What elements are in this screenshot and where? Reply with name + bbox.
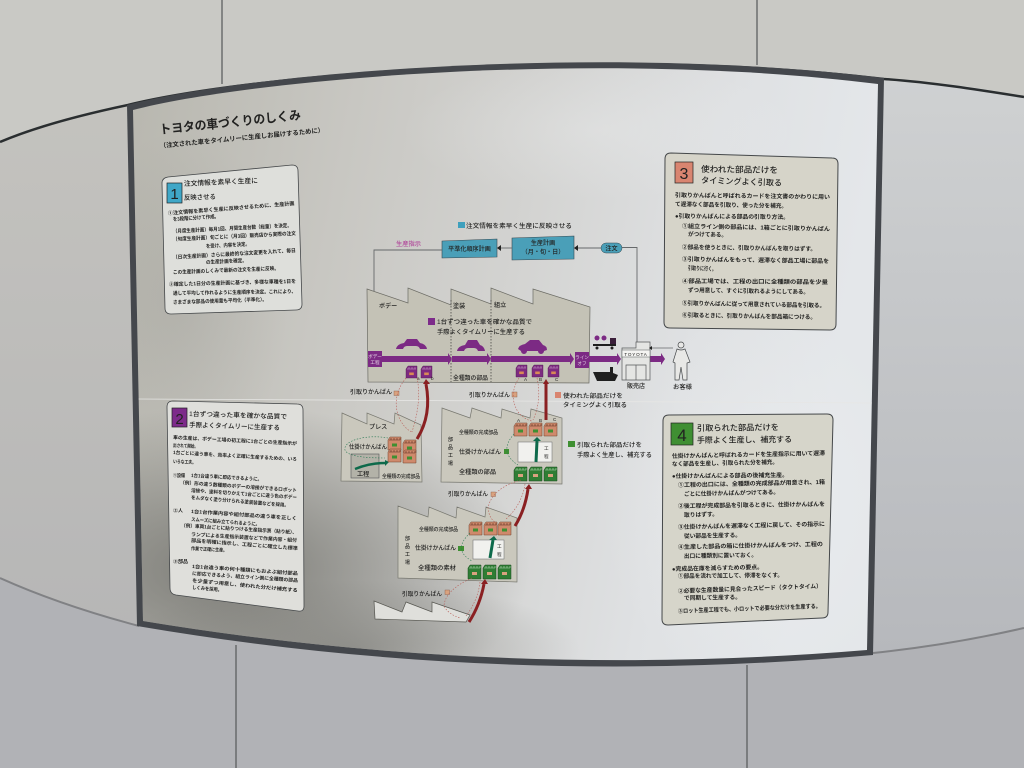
process labels: 塗装 [453,302,465,310]
parts boxes [406,365,559,382]
dealer building [622,342,650,390]
press plant: 工程 [357,470,369,478]
panel 2 body text: 1台1台違う車の何十種類にもおよぶ組付部品 [192,563,298,577]
customer: お客様 [673,383,692,391]
planning flow [372,222,637,349]
panel 4 heading [697,422,792,445]
panel 4 body text: ③ロット生産工程でも、小ロットで必要な分だけを生産する。 [678,602,821,615]
panel 2 body text: 作業で正確に生産。 [191,545,227,554]
panel 1 body text [168,200,296,306]
purple production line: 工程 [370,359,380,366]
badge 3 [675,162,693,183]
press plant [341,413,422,482]
withdrawal kanban labels [350,388,517,598]
panel 1 heading: 反映させる [184,192,216,202]
withdrawal kanban labels: 引取りかんばん [469,391,510,399]
title [159,107,324,150]
process labels: 組立 [494,301,506,309]
panel 3 body text: て遅滞なく部品を引取り、使った分を補充。 [675,200,787,210]
metal plaque [127,62,884,666]
panel 4 body text: ①部品を流れで加工して、停滞をなくす。 [678,571,783,580]
panel 3 body text: ⑤引取りかんばんに従って用意されている部品を引取る。 [682,299,825,309]
panel 1 body text: ①注文情報を素早く生産に反映させるために、生産計画 [168,200,295,217]
parts plant lower: 全種類の完成部品 [419,526,458,533]
panel 1 body text: を受け、内容を決定。 [206,241,250,250]
panel 3 body text: 引取りに行く。 [688,264,716,273]
assembly plant [367,288,665,383]
panel 2 body text: いろな工夫。 [173,458,196,466]
panel 3 body text: ⑥引取るときに、引取りかんばんを部品箱につける。 [682,311,816,321]
panel 2 body text: ランプによる生産指示装置などで作業内容・組付 [191,531,297,544]
panel 2 body text: 出されて開始。 [173,442,198,450]
badge 2 [172,408,187,428]
panel 2 body text: 部品を明確に指示し、工程ごとに確立した標準 [191,537,298,552]
purple production line: オフ [577,361,587,366]
parts plant upper: 工 [448,453,453,459]
panel 3 body text: ずつ用意して、すぐに引取れるようにしてある。 [688,286,809,296]
parts plant upper: 全種類の部品 [459,468,496,476]
truck and ship [593,336,618,381]
purple production line [368,351,665,368]
panel 2 body text: 1台1台違う車に即応できるように。 [191,472,262,483]
panel 4 body text: で同期して生産する。 [684,593,741,602]
process labels: ボデー [379,302,397,310]
panel 3: pull only used parts [664,153,838,330]
panel 2 body text: に即応できるよう、組立ライン側に全種類の部品 [192,570,298,584]
press plant: プレス [369,424,387,431]
panel 4 heading: 手際よく生産し、補充する [697,434,792,445]
label: section 3 reference [555,392,627,409]
dealer building: TOYOTA [624,352,648,357]
label: section 3 reference: 使われた部品だけを [563,392,623,400]
label: section 4 reference: 引取られた部品だけを [577,441,642,449]
panel 1: order information [162,165,302,314]
panel 2 heading: 1台ずつ違った車を確かな品質で [189,409,288,421]
panel 4 body text: ③仕掛けかんばんを遅滞なく工程に戻して、その指示に [678,520,825,531]
badge 4: 4 [677,426,687,445]
panel 3 heading: 使われた部品だけを [701,164,778,175]
purple production line: ボデー [368,353,382,360]
label: section 1 reference: 注文情報を素早く生産に反映させる [466,222,572,230]
supplier plant partial [374,601,470,622]
panel 2 body text: スムーズに組み立てられるように。 [191,516,260,528]
press plant: 全種類の完成部品 [382,473,420,480]
badge 2: 2 [175,411,184,428]
panel 4 body text: ●完成品在庫を減らすための要点。 [672,563,763,573]
panel 2 body text: をムダなく塗り分けられる塗装装置などを採用。 [191,494,289,509]
panel 1 heading [184,176,258,202]
box: leveled sequence plan: 平準化順序計画 [448,245,491,253]
customer [649,342,692,391]
purple production line: ライン [575,355,589,361]
title: （注文された車をタイムリーに生産しお届けするために） [159,125,324,150]
label: section 2 reference: 手際よくタイムリーに生産する [437,328,525,336]
panel 2 body text: 1台1台作業内容や組付部品の違う車を正しく [191,508,297,522]
parts plant upper: 仕掛けかんばん [459,448,501,456]
parts plant upper [441,408,562,484]
panel 4 body text: 出口に種類別に置いておく。 [684,551,757,560]
kanban loops dashed [396,378,539,618]
parts plant lower: 品 [405,544,410,550]
box: production plan [512,236,574,260]
label: section 4 reference [568,441,652,459]
panel 3 heading: タイミングよく引取る [701,175,782,188]
parts plant upper: 工 [544,446,549,451]
label: production instruction: 生産指示 [396,240,421,248]
panel 2 body text: （例）車両1台ごとに貼りつける生産指示票（貼り紙）、 [181,522,297,536]
badge 1 [167,183,182,203]
badge 1: 1 [170,186,179,203]
parts plant lower: 全種類の素材 [418,564,456,572]
panel 1 body text: を3段階に分けて作成。 [173,213,219,223]
panel 1 body text: の生産計画を確定。 [206,257,247,266]
box: production plan: （月・旬・日） [522,248,564,256]
panel 3 body text: ③引取りかんばんをもって、遅滞なく部品工場に部品を [682,255,829,265]
red withdrawal arrows [417,379,549,622]
panel 3 body text [675,191,830,321]
panel 3 heading [701,164,782,188]
withdrawal kanban labels: 引取りかんばん [350,388,392,396]
parts plant lower: 場 [405,559,410,566]
parts plant upper: A [517,418,521,423]
arrow: order to plan [372,245,637,349]
panel 2 body text: ③部品 [173,558,188,565]
panel 1 body text: 通して平均して作れるように生産順序を決定。これにより、 [173,288,296,297]
panel 4 heading: 引取られた部品だけを [697,422,779,433]
panel 4: produce and replenish [662,414,833,625]
panel 2: one car at a time [167,401,304,611]
panel 3 body text: ●引取りかんばんによる部品の引取り方法。 [675,212,789,221]
panel 4 body text: ごとに仕掛けかんばんがつけてある。 [684,488,779,498]
parts plant lower: 仕掛けかんばん [415,544,456,552]
pill: order: 注文 [605,244,618,252]
panel 4 body text: ②後工程が完成部品を引取るときに、仕掛けかんばんを [678,500,825,510]
parts plant upper: 全種類の完成部品 [459,429,498,436]
panel 2 body text: （例）形の違う数種類のボデーの溶接ができるロボット [180,479,297,494]
press plant: 仕掛けかんばん [349,443,387,451]
parts plant upper: 部 [448,436,453,443]
parts plant lower [398,506,517,582]
badge 3: 3 [680,166,689,183]
parts boxes: B [539,377,542,382]
parts boxes: C [555,377,559,382]
panel 4 body text: ①工程の出口には、全種類の完成部品が用意され、1箱 [678,478,825,489]
label: all parts: 全種類の部品 [453,374,488,382]
panel 2 body text: を少量ずつ用意し、使われた分だけ補充する [192,577,298,594]
badge 4 [671,423,693,445]
panel 3 body text: 引取りかんばんと呼ばれるカードを注文書のかわりに用い [675,191,830,201]
panel 2 body text: ①設備 [173,472,185,479]
parts plant upper: B [539,418,542,423]
parts plant upper: 品 [448,445,453,451]
parts boxes: a [417,376,420,381]
parts plant upper: C [553,417,557,422]
panel 1 body text: （日次生産計画）さらに最終的な注文変更を入れて、毎日 [173,247,296,261]
label: section 4 reference: 手際よく生産し、補充する [577,451,652,459]
panel 1 body text: （月度生産計画）毎月1回、月間生産台数（総量）を決定。 [173,222,292,235]
panel 2 body text: 溶接や、塗料を切りかえて1台ごとに違う色のボデー [191,487,297,501]
panel 4 body text: 従い部品を生産する。 [684,531,741,540]
parts plant lower: 程 [497,551,502,558]
panel 3 body text: ①組立ライン側の部品には、1箱ごとに引取りかんばん [682,222,830,233]
label: section 2 reference: 1台ずつ違った車を確かな品質で [437,318,532,326]
panel 4 body text: 取りはずす。 [684,510,718,519]
parts plant lower: 工 [497,544,502,549]
parts plant upper: 場 [448,460,453,467]
panel 3 body text: ②部品を使うときに、引取りかんばんを取りはずす。 [682,243,816,253]
label: section 2 reference [428,318,532,336]
dealer building: 販売店 [627,382,645,390]
process labels [379,301,506,310]
panel 2 heading [189,409,288,432]
panel 1 heading: 注文情報を素早く生産に [184,176,258,188]
panel 2 heading: 手際よくタイムリーに生産する [189,420,280,432]
box: production plan: 生産計画 [531,239,555,247]
parts plant lower: 工 [405,552,410,558]
panel 2 body text: 車の生産は、ボデー工場の初工程に1台ごとの生産指示が [173,434,297,447]
panel 2 body text: ②人 [173,507,183,514]
panel 4 body text: ④生産した部品の箱に仕掛けかんばんをつけ、工程の [678,540,823,551]
panel 4 body text: 仕掛けかんばんと呼ばれるカードを生産指示に用いて遅滞 [672,449,825,460]
panel 4 body text: ●仕掛けかんばんによる部品の後補充生産。 [672,471,788,480]
box: leveled sequence plan [442,239,497,258]
panel 3 body text: ④部品工場では、工程の出口に全種類の部品を少量 [682,277,828,286]
panel 2 body text [173,434,298,594]
parts plant lower: 部 [405,535,410,542]
withdrawal kanban labels: 引取りかんばん [402,590,442,598]
parts boxes: A [524,377,528,382]
panel 3 body text: がつけてある。 [688,230,727,239]
car bodies [396,339,547,354]
label: section 3 reference: タイミングよく引取る [563,401,627,409]
parts boxes: b [431,376,434,381]
panel 1 body text: この生産計画のしくみで最新の注文を生産に反映。 [173,265,279,276]
panel 4 body text [672,449,825,615]
panel 4 body text: ②必要な生産数量に見合ったスピード（タクトタイム） [678,582,822,595]
panel 4 body text: なく部品を生産し、引取られた分を補充。 [672,458,778,468]
panel 1 body text: （旬度生産計画）旬ごとに（月3回）販売店から実際の注文 [173,230,296,243]
panel 1 body text: ②確定した1日分の生産計画に基づき、多様な車種を1日を [169,278,296,288]
withdrawal kanban labels: 引取りかんばん [448,490,488,498]
pill: order [601,243,622,253]
title: トヨタの車づくりのしくみ [159,107,302,137]
parts plant upper: 程 [544,453,549,460]
panel 2 body text: 1台ごとに違う車を、効率よく正確に生産するための、いろ [173,449,297,463]
panel 1 body text: さまざまな部品の使用量も平均化（平準化）。 [173,296,267,306]
panel 2 body text: しくみを採用。 [192,584,222,594]
